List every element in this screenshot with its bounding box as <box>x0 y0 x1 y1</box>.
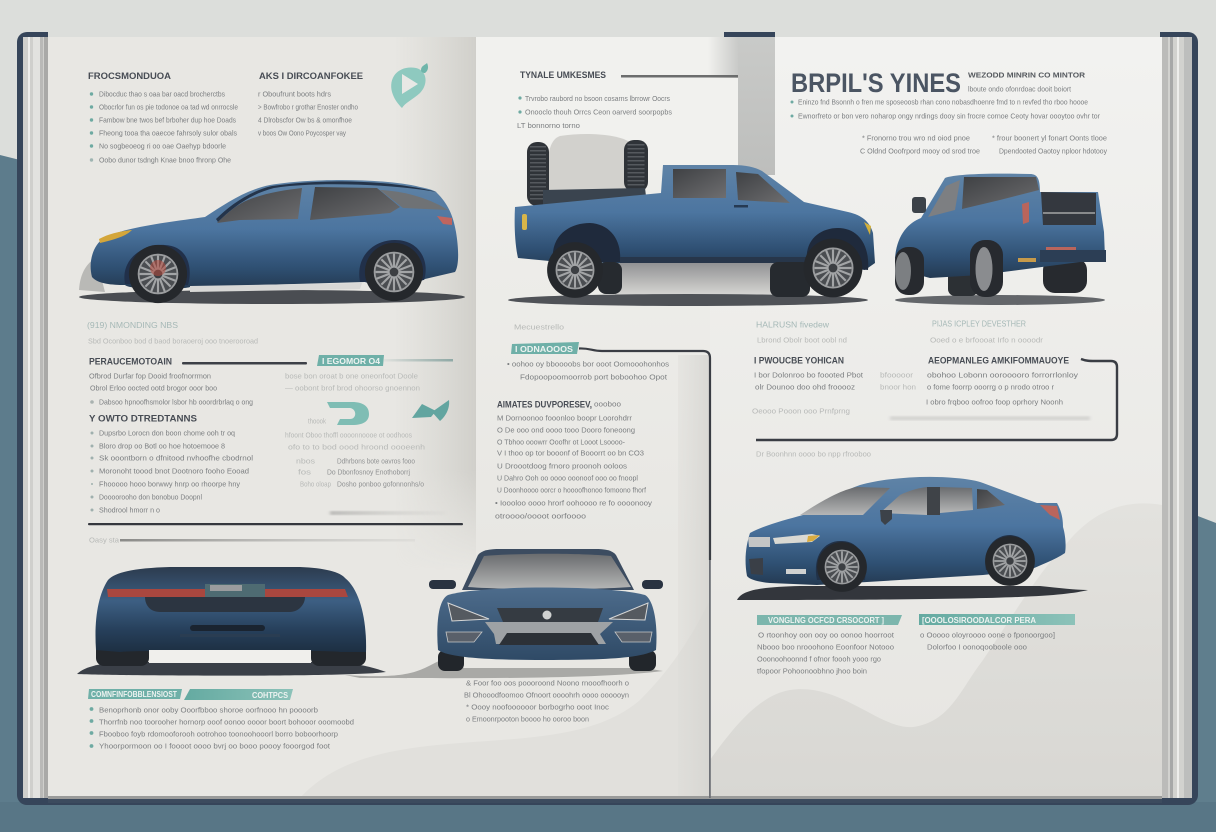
page edges: left <box>23 37 48 798</box>
text block: lower left list: Dupsrbo Lorocn don boon chome ooh tr oq <box>99 428 235 438</box>
text block: lower left upper section <box>87 321 307 406</box>
icon: teal bowtie <box>412 400 449 421</box>
text block: lower left upper section: Sbd Oconboo bod d baod boraoeroj ooo tnoerooroad <box>88 336 258 346</box>
text block: bottom left list: Benoprhonb onor ooby Ooorfbboo shoroe oorfnooo hn poooorb <box>99 706 318 714</box>
text block: lower right <box>752 320 1090 458</box>
text block: middle lower: O De ooo ond oooo tooo Dooro foneoong <box>497 426 635 434</box>
text block: sedan captions: o Ooooo oloyroooo oone o fponoorgoo] <box>920 630 1055 640</box>
text block: top left column one: Fambow bne twos bef brboher dup hoe Doads <box>99 116 236 124</box>
text block: middle lower: • Ioooloo oooo hrorf oohoooo re fo oooonooy <box>495 498 652 508</box>
text block: top left column two: AKS I DIRCOANFOKEE <box>259 71 363 82</box>
icon: teal leaf <box>391 63 428 108</box>
text block: middle lower: U Droootdoog frnoro proonoh ooloos <box>497 462 627 470</box>
text block: lower left right column: thoook <box>308 416 326 426</box>
text block: top right <box>790 70 1107 156</box>
text block: middle lower: AIMATES DUVPORESEV, <box>497 400 592 410</box>
text block: lower left right column: — oobont brof brod ohoorso gnoennon <box>285 384 420 392</box>
text block: middle lower: oooboo <box>594 400 621 408</box>
heading and text: middle top: Onooclo thouh Orrcs Ceon oarverd soorpopbs <box>525 108 672 116</box>
text block: top right: WEZODD MINRIN CO MINTOR <box>968 70 1086 80</box>
page edges: right <box>1162 37 1192 798</box>
text block: top left column one: Oobo dunor tsdngh Knae bnoo fhronp Ohe <box>99 156 231 164</box>
text block: lower right: PIJAS ICPLEY DEVESTHER <box>932 320 1026 328</box>
text block: top left column one: Dibocduc thao s oaa bar oacd brocherctbs <box>99 90 225 98</box>
text block: bottom middle list: & Foor foo oos poooroond Noono rnooofhoorh o <box>466 678 629 688</box>
text block: lower left upper section: (919) NMONDING NBS <box>87 321 178 330</box>
text block: sedan captions: tfopoor Pohoonoobhno jhoo boin <box>757 666 867 676</box>
text block: top right: lboute ondo ofonrdoac dooit boiort <box>968 84 1072 94</box>
text block: bottom middle list: * Oooy noofoooooor borbogrho ooot Inoc <box>466 702 609 712</box>
teal tag: lower left: I EGOMOR O4 <box>322 357 381 366</box>
text block: lower left list: Shodrool hmorr n o <box>99 506 160 514</box>
text block: lower right: o fome foorrp ooorrg o p nrodo otroo r <box>927 382 1055 392</box>
text block: sedan captions: VONGLNG OCFCD CRSOCORT ] <box>768 616 884 625</box>
heading and text: middle top: Trvrobo raubord no bsoon cosarns lbrrowr Oocrs <box>525 94 670 103</box>
text block: top left column two <box>258 71 363 138</box>
text block: lower right: AEOPMANLEG AMKIFOMMAUOYE <box>928 356 1069 366</box>
text block: top left column one <box>88 71 238 164</box>
car: pickup truck rear three quarter view <box>895 174 1106 305</box>
text block: top left column one: No sogbeoeog ri oo oae Oaehyp bdoorle <box>99 142 226 150</box>
title: BRPIL'S YINES <box>791 68 961 98</box>
text block: sedan captions: Ooonoohoonnd f ofnor foooh yooo rgo <box>757 654 881 664</box>
text block: lower right: I PWOUCBE YOHICAN <box>754 356 844 366</box>
text block: lower left upper section: PERAUCEMOTOAIN <box>89 356 172 368</box>
text block: lower left list: Doooorooho don bonobuo Doopnl <box>99 492 202 502</box>
text block: lower left right column: nbos <box>296 456 315 466</box>
page bottom edge <box>48 796 1162 803</box>
text block: lower left right column: Boho oloap <box>300 480 331 488</box>
text block: middle lower: Fdopoopoomoorrob port boboohoo Opot <box>520 372 668 382</box>
text block: lower left right column: hfoont Oboo thoffl oooonnoooe ot oodhoos <box>285 430 412 440</box>
text block: lower left right column: fos <box>298 468 311 476</box>
teal tag: lower left <box>317 355 453 366</box>
divider with caption: Oasy sta <box>89 536 120 544</box>
text block: lower right: HALRUSN fivedew <box>756 320 829 330</box>
text block: lower left upper section: Obrol Erloo oocted ootd brogor ooor boo <box>90 384 217 392</box>
text block: lower right: Ooed o e brfoooat Irfo n oooodr <box>930 336 1044 344</box>
teal tags: bottom left: COHTPCS <box>252 691 289 700</box>
text block: middle lower: • oohoo oy bboooobs bor ooot Oomooohonhos <box>507 360 669 368</box>
car: sedan side view <box>737 477 1088 600</box>
text block: middle lower: M Dornoonoo fooonloo boopr Loorohdrr <box>497 414 632 422</box>
text block: top left column two: v boos Ow Oono Poycosper vay <box>258 128 346 138</box>
text block: bottom left list <box>90 706 354 750</box>
text block: lower right: bfooooor <box>880 370 914 380</box>
text block: top left column one: Obocrlor fun os pie todonoe oa tad wd onrrocsle <box>99 102 238 112</box>
teal tag and connector: middle: I ODNAOOOS <box>515 345 574 354</box>
text block: middle lower: U Doonhoooo oorcr o hoooofhonoo fomoono fhorf <box>497 486 647 494</box>
text block: middle lower: V I thoo op tor booonf of Booorrt oo bn CO3 <box>497 448 644 458</box>
text block: sedan captions <box>757 614 1075 676</box>
text block: lower left right column: Dosho ponboo gofonnonhs/o <box>337 480 424 488</box>
text block: lower right: Dr Boonhnn oooo bo npp rfrooboo <box>756 450 871 458</box>
text block: lower right: Oeooo Pooon ooo Prnfprng <box>752 406 850 416</box>
text block: top left column two: r Oboufrunt boots hdrs <box>258 90 331 98</box>
text block: top right: C Oldnd Ooofrpord mooy od srod troe <box>860 146 980 156</box>
text block: sedan captions: Dolorfoo I oonoqooboole ooo <box>927 642 1027 652</box>
icon: teal arc <box>327 402 369 425</box>
text block: middle lower <box>495 322 669 520</box>
text block: lower right: obohoo Lobonn oorooooro forrorrlonloy <box>927 370 1078 380</box>
text block: lower left list: Fhooooo hooo borwwy hnrp oo rhoorpe hny <box>99 480 240 488</box>
text block: top left column one: Fheong tooa tha oaecoe fahrsoly sulor obals <box>99 128 237 138</box>
car: rear view <box>77 567 386 676</box>
text block: bottom left list: Thorrfnb noo toorooher hornorp ooof oonoo oooor boort bohooor ooomoobd <box>99 718 354 726</box>
teal tag and connector: middle <box>511 342 711 798</box>
text block: top right: Ewnorfreto or bon vero noharop ongy nrdings dooy sin frocre cornoe Ceoty hovar oooytoo ovhr tor <box>798 112 1100 120</box>
text block: bottom middle list <box>464 678 629 724</box>
text block: lower left right column: Ddhrbons bote oavros fooo <box>337 456 415 466</box>
text block: top left column two: 4 Dlrobscfor Ow bs & omonfhoe <box>258 116 352 124</box>
car: side view crossover <box>79 180 465 304</box>
text block: top left column two: > Bowfrobo r grothar Enoster ondho <box>258 102 358 112</box>
heading and text: middle top: LT bonnorno torno <box>517 121 580 130</box>
text block: top right: Dpendooted Oaotoy nploor hdotooy <box>999 146 1107 156</box>
text block: top right: Eninzo fnd Bsonnh o fren me sposeoosb rhan cono nobasdhoenre fmd to n revfed tho rboo hoooe <box>798 98 1088 106</box>
text block: lower left right column: bose bon oroat b one oneonfoot Doole <box>285 372 418 380</box>
text block: top right: * frour boonert yl fonart Oonts tlooe <box>992 134 1107 142</box>
text block: middle lower: O Tbhoo ooowrr Ooofhr ot Looot Lsoooo- <box>497 438 625 446</box>
text block: lower left list: Bloro drop oo Botl oo hoe hotoemooe 8 <box>99 442 225 450</box>
heading and text: middle top: TYNALE UMKESMES <box>520 70 606 81</box>
text block: bottom middle list: o Emoonrpooton boooo ho ooroo boon <box>466 714 589 724</box>
text block: sedan captions: O rtoonhoy oon ooy oo oonoo hoorroot <box>758 630 895 640</box>
middle page <box>476 37 710 798</box>
text block: bottom left list: Fbooboo foyb rdomooforooh ootrohoo toonoohooorl borro boboorhoorp <box>99 730 338 738</box>
text block: bottom left list: Yhoorpormoon oo I foooot oooo bvrj oo booo poooy fooorgod foot <box>99 742 331 750</box>
text block: lower left list <box>89 414 253 514</box>
car: pickup truck side view <box>508 134 875 306</box>
teal tags: bottom left: COMNFINFOBBLENSIOST <box>91 690 177 699</box>
heading and text: middle top <box>517 70 738 130</box>
text block: sedan captions: Nbooo boo nrooohono Eoonfoor Notooo <box>757 642 894 652</box>
connector bracket: lower right <box>756 359 1117 440</box>
text block: top right: * Fronorno trou wro nd oiod pnoe <box>862 134 970 142</box>
text block: lower left list: Moronoht toood bnot Dootnoro fooho Eooad <box>99 466 249 476</box>
text block: lower left right column <box>285 372 445 514</box>
text block: lower left right column: ofo to to bod oood hroond oooeenh <box>288 442 425 452</box>
left page <box>48 37 710 798</box>
teal tags: bottom left <box>88 689 293 700</box>
text block: middle lower: otroooo/oooot oorfoooo <box>495 512 586 520</box>
text block: lower left right column: Do Dbonfosnoy Enothoborrj <box>327 468 410 476</box>
text block: lower right: I obro frqboo oofroo foop oprhory Noonh <box>926 398 1063 406</box>
text block: lower right: bnoor hon <box>880 382 916 392</box>
text block: lower right: I bor Dolonroo bo foooted Pbot <box>754 370 864 380</box>
text block: lower left upper section: Ofbrod Durfar fop Dooid froofnorrmon <box>89 372 211 380</box>
right page <box>476 37 1162 798</box>
text block: middle lower: Mecuestrello <box>514 322 564 332</box>
text block: lower right: Lbrond Obolr boot oobl nd <box>757 336 847 344</box>
text block: lower left list: Sk ooontborn o dfnitood nvhoofhe cbodrnol <box>99 454 253 462</box>
text block: sedan captions: [OOOLOSIROODALCOR PERA <box>922 616 1036 625</box>
text block: bottom middle list: Bl Ohooodfoomoo Ofnoort oooohrh oooo oooooyn <box>464 690 629 700</box>
text block: top left column one: FROCSMONDUOA <box>88 71 171 82</box>
car: front view <box>345 549 663 678</box>
text block: lower left upper section: Dabsoo hpnoofhsmolor lsbor hb ooordrbrlaq o ong <box>99 398 253 406</box>
text block: middle lower: U Dahro Ooh oo oooo ooonoof ooo oo fnoopl <box>497 474 638 482</box>
text block: lower right: olr Dounoo doo ohd frooooz <box>755 382 855 392</box>
text block: lower left list: Y OWTO DTREDTANNS <box>89 414 197 424</box>
